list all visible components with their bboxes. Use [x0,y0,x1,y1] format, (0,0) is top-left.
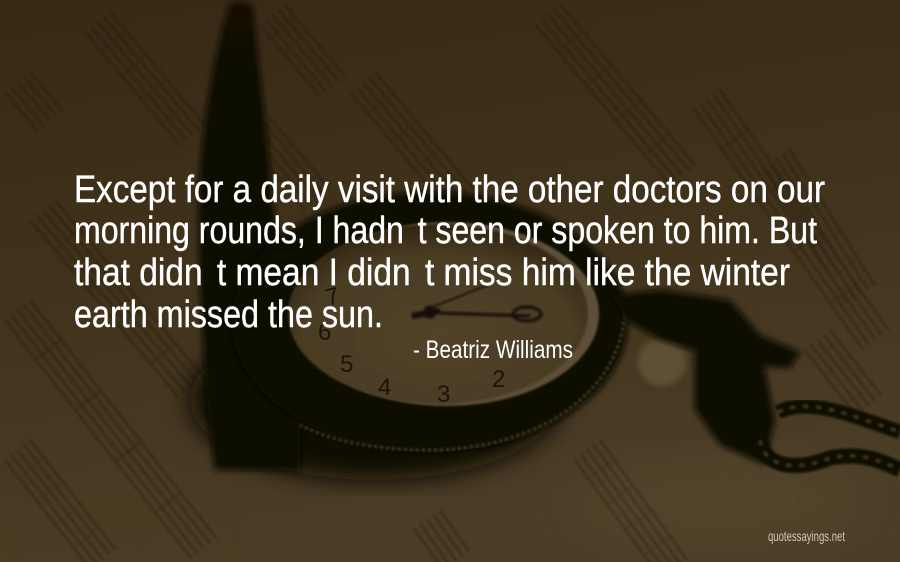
pocket watch lid [199,2,300,470]
quote line 2: morning rounds, I hadn’’t seen or spoken to him. But [74,210,817,252]
watch case [232,192,628,452]
quote text [74,169,825,336]
watch chain [760,406,900,470]
attribution: - Beatriz Williams [413,336,573,364]
silver rim [295,222,599,406]
watch hands [412,285,541,321]
dial numerals: 5 [340,351,353,378]
quote line 3: that didn’’t mean I didn’’t miss him like the winter [74,252,790,294]
quote line 4: earth missed the sun. [74,294,383,336]
pocket watch [232,192,628,452]
paper highlight beside the crown [638,338,686,386]
dial numerals: 2 [492,366,505,393]
beaded rim [300,310,625,450]
shadow under the watch [190,320,560,480]
dial numerals: 6 [318,319,331,346]
dial numerals [318,282,505,408]
dial numerals: 4 [378,374,391,401]
dial numerals: 7 [323,282,342,312]
watch crown and chain knot [612,290,800,465]
watermark: quotessayings.net [768,528,845,544]
dial numerals: 3 [437,381,450,408]
